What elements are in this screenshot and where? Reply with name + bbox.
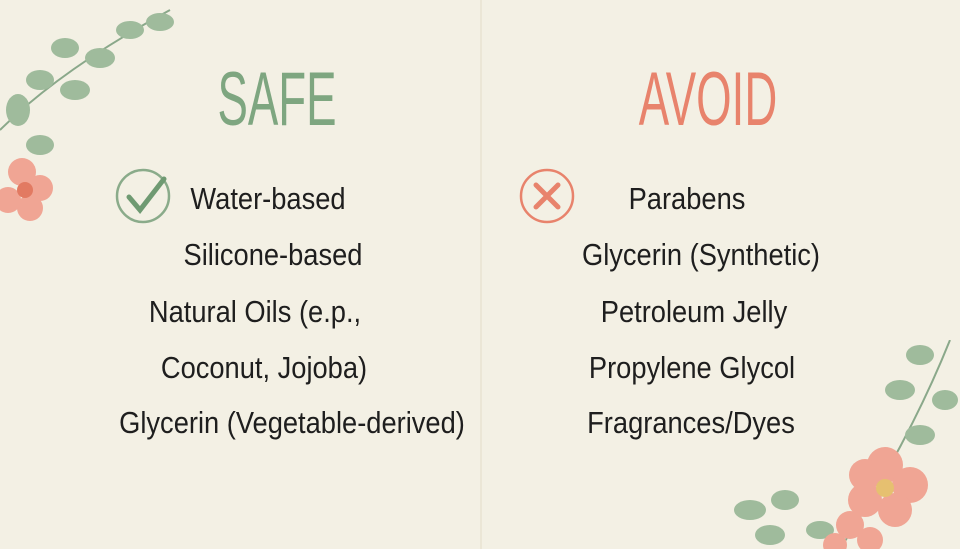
list: avoid: Fragrances/Dyes <box>587 405 795 440</box>
list: safe: Coconut, Jojoba) <box>161 350 367 385</box>
list: safe: Water-based <box>190 181 346 216</box>
decoration: top-left leaves <box>0 9 174 221</box>
list: safe: Glycerin (Vegetable-derived) <box>119 405 465 440</box>
list: avoid: Parabens <box>629 181 745 216</box>
heading: AVOID: AVOID <box>639 57 777 142</box>
icon: cross <box>520 168 574 224</box>
list: avoid: Glycerin (Synthetic) <box>582 237 820 272</box>
list: safe <box>119 181 465 440</box>
decoration: bottom-right flowers <box>734 340 958 549</box>
heading: SAFE: SAFE <box>217 57 337 142</box>
list: avoid <box>582 181 820 440</box>
icon: check <box>116 168 170 224</box>
list: avoid: Propylene Glycol <box>589 350 795 385</box>
list: safe: Natural Oils (e.p., <box>149 294 361 329</box>
list: avoid: Petroleum Jelly <box>601 294 787 329</box>
list: safe: Silicone-based <box>184 237 362 272</box>
